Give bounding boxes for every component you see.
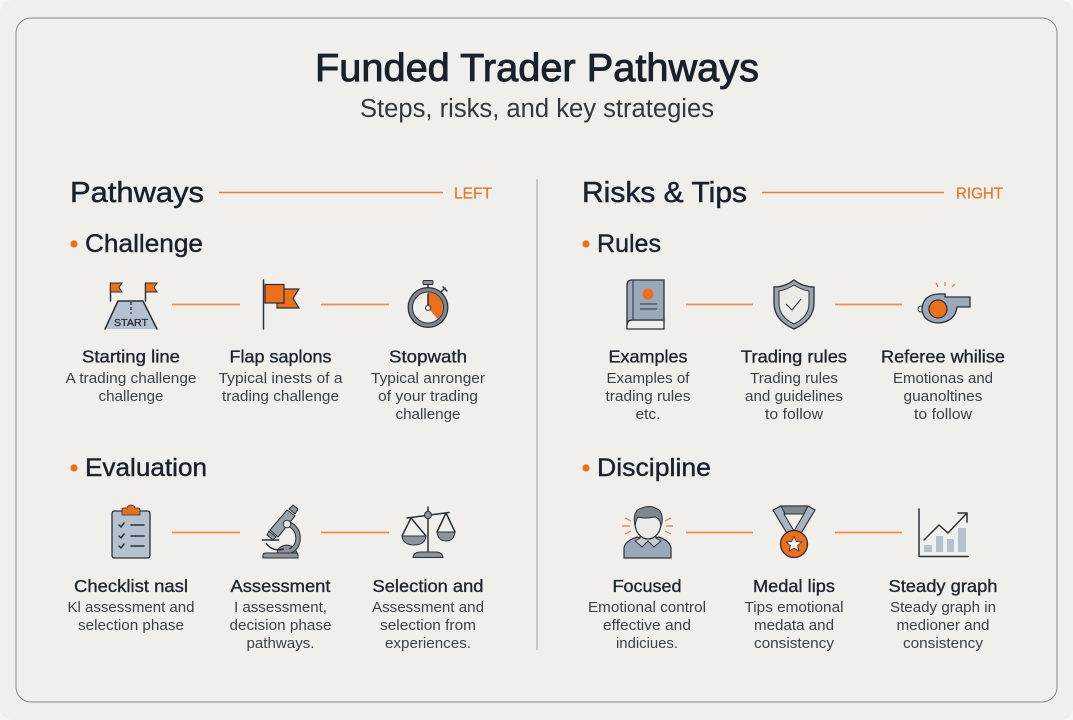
connector (686, 304, 753, 306)
item: Flap saplons: Typical inests of a (218, 370, 343, 387)
item: Referee whilise: Referee whilise (881, 346, 1005, 366)
item: Starting line: A trading challenge (66, 370, 196, 387)
item: Assessment: I assessment, (234, 599, 327, 616)
item: Assessment (230, 576, 332, 652)
icon: starting line (105, 283, 157, 329)
heading rule right (762, 192, 944, 194)
panel: left column Pathways (66, 177, 492, 652)
item: Focused: effective and (603, 617, 691, 634)
item: Selection and: selection from (380, 617, 476, 634)
item: Referee whilise: to follow (914, 406, 972, 423)
item: Examples: Examples (608, 346, 688, 366)
connector (686, 532, 753, 534)
item: Medal lips: Medal lips (753, 576, 835, 596)
item: Medal lips: consistency (754, 635, 835, 652)
item: Referee whilise (881, 346, 1005, 423)
item: Flap saplons (218, 346, 343, 405)
icon: shield (774, 280, 814, 329)
item: Focused: Emotional control (588, 599, 706, 616)
subheading: Discipline: Discipline (597, 454, 711, 482)
item: Selection and (372, 576, 484, 652)
icon: checklist (112, 505, 150, 558)
item: Examples: trading rules (606, 388, 690, 405)
icon: book (627, 280, 664, 329)
item: Checklist nasl (68, 576, 194, 634)
item: Selection and: Assessment and (372, 599, 484, 616)
item: Medal lips (744, 576, 844, 652)
item: Assessment: pathways. (246, 635, 314, 652)
connector (172, 532, 240, 534)
item: Flap saplons: Flap saplons (230, 346, 332, 366)
panel: right column Risks and Tips (582, 177, 1005, 652)
item: Checklist nasl: selection phase (78, 617, 184, 634)
item: Medal lips: Tips emotional (744, 599, 844, 616)
item: Trading rules: and guidelines (745, 388, 843, 405)
subheading: Evaluation: Evaluation (85, 454, 207, 482)
item: Steady graph: medioner and (896, 617, 990, 634)
item: Steady graph: consistency (903, 635, 984, 652)
item: Referee whilise: guanoltines (904, 388, 982, 405)
item: Steady graph (888, 576, 998, 652)
item: Selection and: experiences. (385, 635, 471, 652)
heading: Pathways: Pathways (70, 177, 204, 209)
tag: LEFT: LEFT (454, 186, 492, 202)
icon: starting line: START (114, 317, 149, 329)
item: Stopwath: Stopwath (389, 346, 467, 366)
connector (172, 304, 240, 306)
icon: medal (773, 506, 815, 558)
icon: focused person (622, 507, 673, 558)
connector (321, 532, 389, 534)
subheading: Challenge: Challenge (85, 230, 203, 258)
item: Stopwath: Typical anronger (371, 370, 485, 387)
center divider (536, 179, 538, 650)
heading rule left (219, 192, 443, 194)
item: Checklist nasl: Checklist nasl (74, 576, 188, 596)
icon: steady graph (919, 509, 968, 556)
item: Flap saplons: trading challenge (222, 388, 339, 405)
item: Focused (588, 576, 706, 652)
icon: whistle (918, 282, 970, 323)
item: Checklist nasl: Kl assessment and (68, 599, 194, 616)
item: Assessment: decision phase (230, 617, 332, 634)
icon: stopwatch (408, 280, 448, 328)
item: Medal lips: medata and (754, 617, 834, 634)
item: Trading rules (741, 346, 847, 423)
icon: scales (402, 507, 455, 558)
item: Trading rules: Trading rules (741, 346, 847, 366)
item: Focused: Focused (612, 576, 682, 596)
item: Starting line: challenge (98, 388, 164, 405)
item: Starting line: Starting line (82, 346, 180, 366)
item: Referee whilise: Emotionas and (893, 370, 993, 387)
connector (835, 532, 902, 534)
subtitle: Steps, risks, and key strategies (360, 95, 714, 123)
item: Examples: etc. (636, 406, 660, 423)
item: Trading rules: to follow (765, 406, 823, 423)
item: Examples (606, 346, 690, 423)
item: Stopwath (371, 346, 485, 423)
item: Steady graph: Steady graph (888, 576, 998, 596)
item: Examples: Examples of (606, 370, 690, 387)
connector (321, 304, 389, 306)
title: Funded Trader Pathways (315, 47, 759, 90)
item: Assessment: Assessment (230, 576, 331, 596)
item: Stopwath: challenge (396, 406, 460, 423)
item: Trading rules: Trading rules (750, 370, 838, 387)
item: Selection and: Selection and (372, 576, 484, 596)
item: Stopwath: of your trading (378, 388, 478, 405)
item: Focused: indiciues. (616, 635, 678, 652)
item: Starting line (66, 346, 196, 405)
tag: RIGHT: RIGHT (956, 186, 1003, 202)
item: Steady graph: Steady graph in (890, 599, 996, 616)
subheading: Rules: Rules (597, 230, 661, 258)
connector (835, 304, 902, 306)
icon: flag (264, 280, 299, 329)
heading: Risks & Tips: Risks & Tips (582, 177, 747, 209)
icon: microscope (262, 505, 298, 558)
